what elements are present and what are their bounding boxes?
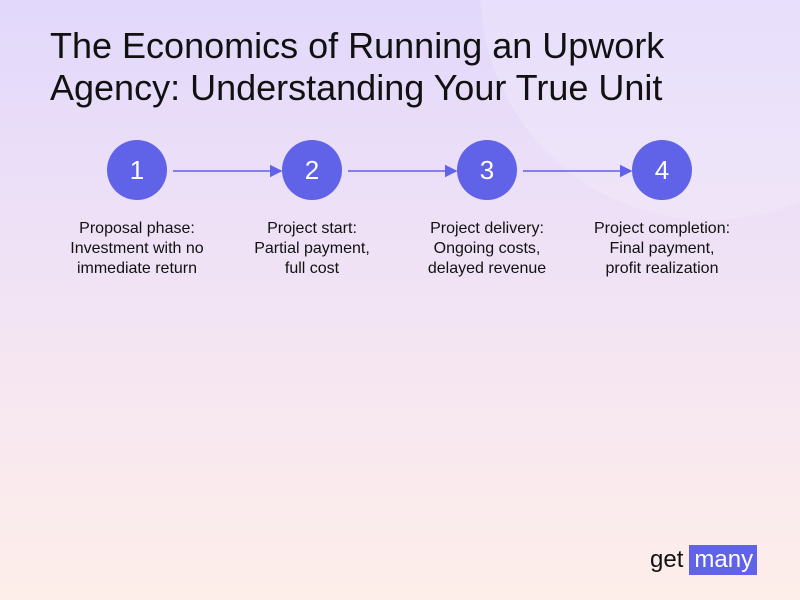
label 4: Final payment,	[610, 240, 714, 257]
step 4	[632, 140, 692, 200]
label 2: Project start:	[267, 220, 357, 237]
label 2	[254, 220, 370, 277]
label 4: profit realization	[606, 260, 718, 277]
label 3: Project delivery:	[430, 220, 544, 237]
step 3	[457, 140, 517, 200]
label 4	[594, 220, 730, 277]
arrows	[173, 164, 632, 178]
logo: many	[694, 546, 753, 573]
label 3: Ongoing costs,	[434, 240, 540, 257]
label 4: Project completion:	[594, 220, 730, 237]
step 2	[282, 140, 342, 200]
label 1: immediate return	[77, 260, 197, 277]
label 2: Partial payment,	[254, 240, 370, 257]
label 2: full cost	[285, 260, 339, 277]
step 2: 2	[305, 155, 319, 185]
step 1: 1	[130, 155, 144, 185]
step 3: 3	[480, 155, 494, 185]
label 1: Investment with no	[70, 240, 204, 257]
step 4: 4	[655, 155, 669, 185]
logo	[650, 545, 757, 575]
title: The Economics of Running an Upwork Agency: Understanding Your True Unit	[50, 25, 664, 108]
logo: get	[650, 546, 683, 573]
label 3: delayed revenue	[428, 260, 546, 277]
label 1: Proposal phase:	[79, 220, 195, 237]
label 3	[428, 220, 546, 277]
label 1	[70, 220, 204, 277]
step 1	[107, 140, 167, 200]
